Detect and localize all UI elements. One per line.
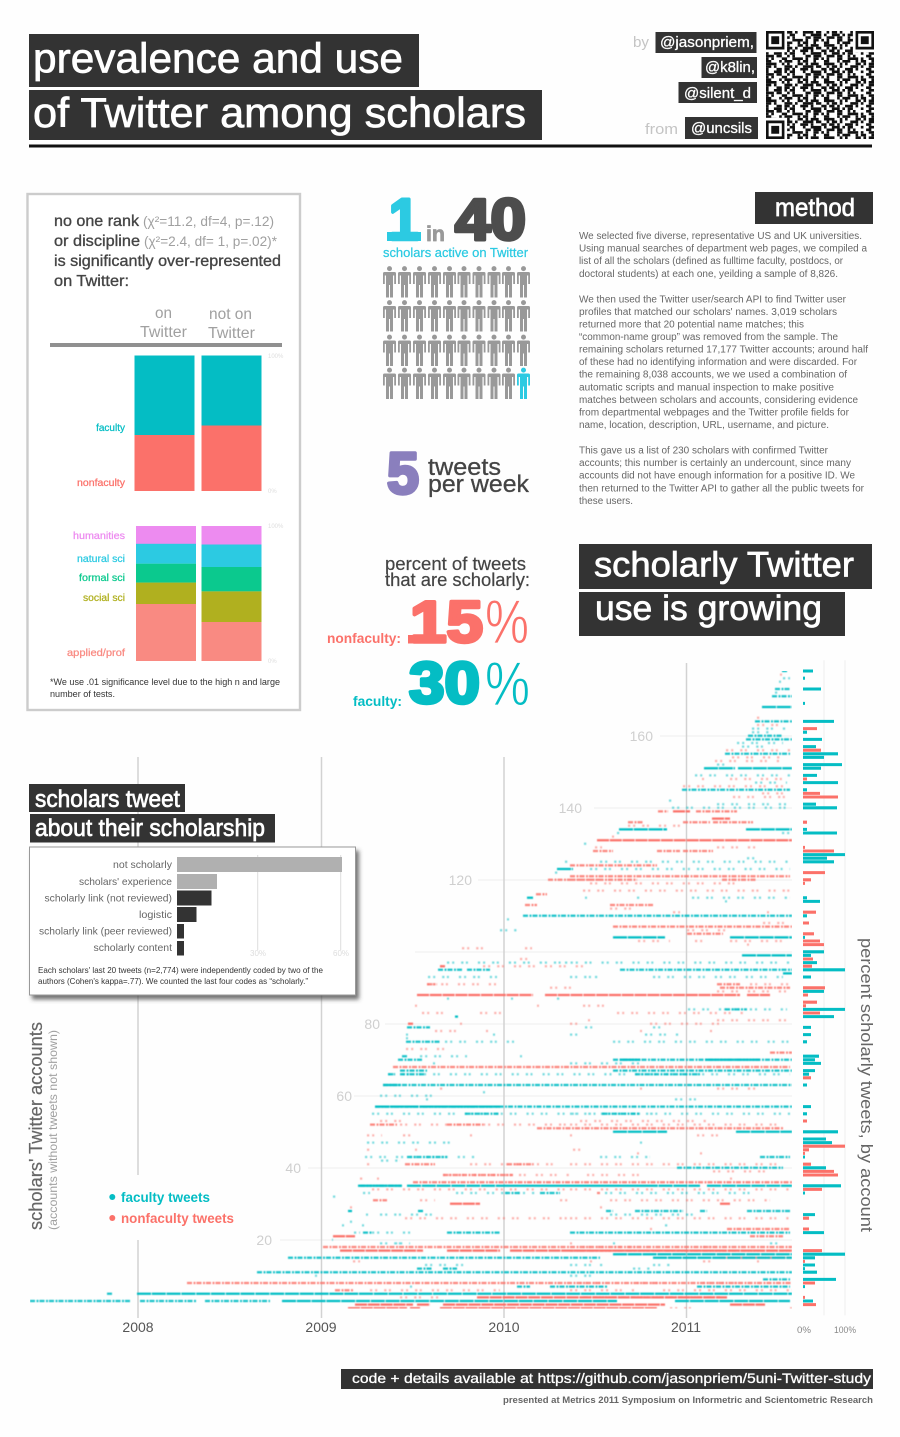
bar chart gridlines [258, 855, 341, 950]
medium nonfaculty tweets [187, 811, 792, 1297]
heading: scholarly Twitter use is growing: scholarly Twitter [594, 546, 854, 584]
text block: method description: from departmental webpages and the Twitter profile fields for [579, 408, 850, 418]
footer: code link [341, 1369, 873, 1389]
footnote: number of tests. [50, 689, 115, 699]
chart note [38, 965, 323, 986]
panel: tweet coding bar chart [30, 847, 356, 995]
stat: nonfaculty 15%: % [485, 588, 529, 657]
heading: method [755, 192, 873, 224]
bar axis labels [797, 1325, 856, 1336]
account-axis tick labels: 60 [336, 1088, 352, 1104]
by label: by [633, 34, 650, 51]
column headers: Twitter [208, 325, 255, 342]
title line 2: of Twitter among scholars [33, 89, 526, 136]
bar chart: not scholarly [113, 859, 173, 871]
bar axis title: percent scholarly tweets, by account [857, 938, 875, 1232]
chart: rank stacked bars: nonfaculty [77, 478, 125, 489]
author: k8lin: @k8lin, [705, 59, 755, 76]
heading: scholars tweet about their scholarship: scholars tweet [35, 786, 180, 813]
stat: 5 tweets per week: per week [428, 471, 530, 498]
panel heading: no one rank [54, 213, 140, 230]
from label: from [645, 121, 678, 138]
panel: rank and discipline [28, 194, 300, 710]
bar chart: 30% [250, 949, 266, 958]
account-axis tick labels [256, 728, 653, 1248]
chart: rank stacked bars: 100% [268, 354, 284, 360]
text block: method description: matches between scholars and accounts, considering evidence [579, 395, 858, 406]
panel heading: or discipline [54, 233, 140, 250]
text block: method description: “common-name group” was removed from the sample. The [579, 332, 838, 343]
chart: rank stacked bars [77, 354, 284, 495]
heading: scholarly Twitter use is growing [579, 544, 872, 636]
icon: QR code [766, 31, 874, 139]
stat: faculty 30%: 30 [409, 651, 480, 716]
chart: discipline stacked bars: natural sci [77, 554, 125, 565]
chart: rank stacked bars: faculty [96, 423, 125, 434]
stat: 5 tweets per week: 5 [387, 442, 419, 506]
stat heading: percent of tweets [385, 554, 530, 590]
chart note: authors (Cohen's kappa=.77). We counted the last four codes as “scholarly.” [38, 976, 308, 986]
y axis label [25, 1022, 60, 1230]
stat: faculty 30%: faculty: [353, 693, 402, 709]
pictogram: 39 of 40 people [383, 266, 530, 399]
footer: code link: code + details available at https://github.com/jasonpriem/5uni-Twitter-study [352, 1370, 871, 1386]
panel heading [54, 213, 281, 290]
text block: method description: automatic scripts and manual inspection to make positive [579, 382, 834, 394]
faculty bars [803, 671, 845, 1301]
panel heading: (χ²=2.4, df= 1, p=.02)* [144, 233, 278, 249]
year labels [122, 1319, 701, 1335]
bar chart: 60% [333, 949, 349, 958]
heading: scholarly Twitter use is growing: use is growing [595, 589, 822, 628]
heading: scholars tweet about their scholarship [29, 784, 275, 842]
column headers: on [155, 305, 172, 322]
authors [633, 32, 758, 139]
chart: discipline stacked bars: social sci [83, 593, 125, 604]
affiliation: uncsils: @uncsils [691, 120, 752, 137]
year labels: 2010 [488, 1319, 520, 1335]
footnote [50, 677, 280, 699]
text block: method description: Using manual searches of department web pages, we compiled a [579, 244, 867, 254]
column headers: Twitter [140, 324, 187, 341]
author: silent_d: @silent_d [684, 85, 751, 102]
stat: 1 in 40: in [426, 223, 445, 246]
dense nonfaculty tweets [333, 811, 792, 1308]
chart: discipline stacked bars: applied/prof [67, 648, 125, 659]
year labels: 2008 [122, 1319, 154, 1335]
stat: nonfaculty 15%: 15 [410, 590, 483, 655]
text block: method description: accounts did not have enough information for a positive ID. We [579, 470, 855, 482]
panel heading: on Twitter: [54, 273, 129, 290]
text block: method description: doctoral students) at each one, yeilding a sample of 8,826. [579, 269, 838, 280]
account-axis tick labels: 20 [256, 1232, 272, 1248]
stat: nonfaculty 15% [327, 588, 529, 657]
account-axis tick labels: 160 [630, 728, 653, 744]
caption: scholars active on Twitter [383, 246, 528, 260]
stat heading: percent of tweets: that are scholarly: [385, 570, 530, 590]
chart: tweets timeline dot plot [25, 660, 875, 1336]
panel heading: is significantly over-represented [54, 253, 281, 270]
legend [109, 1190, 234, 1226]
chart: discipline stacked bars [67, 524, 284, 665]
text block: method description: This gave us a list of 230 scholars with confirmed Twitter [579, 446, 829, 456]
panel heading: (χ²=11.2, df=4, p=.12) [143, 213, 274, 229]
account-axis tick labels: 140 [559, 800, 582, 816]
chart: discipline stacked bars: formal sci [79, 573, 125, 584]
column headers [140, 305, 255, 342]
account-axis tick labels: 80 [364, 1016, 380, 1032]
bar chart: scholarly content [94, 942, 172, 954]
bar chart: scholars' experience [79, 876, 172, 888]
stat: faculty 30%: % [485, 650, 530, 719]
text block: method description: these users. [579, 496, 633, 507]
header rule [29, 144, 872, 148]
footer: presented at: presented at Metrics 2011 Symposium on Informetric and Scientometric Research [503, 1395, 873, 1406]
heading: scholars tweet about their scholarship: about their scholarship [35, 815, 265, 842]
text block: method description: then returned to the Twitter API to gather all the public tweets for [579, 484, 865, 494]
stat heading: percent of tweets: percent of tweets [385, 554, 526, 574]
chart: discipline stacked bars: 0% [268, 659, 277, 665]
account-axis tick labels: 120 [449, 872, 472, 888]
text block: method description: accounts; this number is certainly an undercount, since many [579, 458, 851, 469]
chart note: Each scholars' last 20 tweets (n=2,774) were independently coded by two of the [38, 965, 323, 975]
chart: discipline stacked bars: 100% [268, 524, 284, 530]
bar axis labels: 0% [797, 1325, 812, 1336]
bar chart: logistic [139, 909, 172, 921]
column headers: not on [209, 306, 252, 323]
text block: method description: remaining scholars returned 17,177 Twitter accounts; around half [579, 344, 868, 356]
nonfaculty bars [803, 729, 845, 1305]
medium faculty tweets [30, 671, 792, 1301]
legend: faculty tweets [121, 1190, 210, 1205]
tweet dots by account [30, 671, 792, 1308]
stat: 5 tweets per week: tweets [428, 454, 501, 481]
column header rule [50, 343, 282, 347]
scholarly share bars by account [803, 660, 845, 1315]
sparse faculty tweets [315, 678, 792, 1287]
gridlines [280, 736, 792, 1240]
author: jasonpriem: @jasonpriem, [660, 34, 754, 51]
stat: nonfaculty 15%: nonfaculty: [327, 630, 401, 646]
dense faculty tweets [137, 707, 792, 1301]
legend: nonfaculty tweets [121, 1211, 234, 1226]
text block: method description: We then used the Twitter user/search API to find Twitter user [579, 294, 847, 306]
bar chart [39, 857, 349, 958]
chart: rank stacked bars: 0% [268, 489, 277, 495]
header: title [29, 34, 542, 140]
text block: method description: the remaining 8,038 accounts, we we used a combination of [579, 370, 847, 380]
text block: method description: of these had no identifying information and were discarded. For [579, 357, 858, 368]
bar chart: scholarly link (peer reviewed) [39, 926, 172, 938]
account-axis tick labels: 40 [285, 1160, 301, 1176]
year labels: 2011 [671, 1319, 701, 1335]
text block: method description: name, location, description, URL, username, and picture. [579, 420, 829, 431]
stat: 1 in 40: 1 [389, 188, 419, 252]
stat: 1 in 40: 40 [455, 188, 526, 252]
bar grid [824, 660, 845, 1315]
text block: method description: list of all the scholars (defined as fulltime faculty, postdocs, or [579, 256, 844, 267]
stat: 1 in 40 [383, 188, 528, 260]
stat: 5 tweets per week [387, 442, 530, 506]
bar axis labels: 100% [834, 1325, 856, 1336]
footnote: *We use .01 significance level due to the high n and large [50, 677, 280, 687]
year lines [138, 663, 686, 1318]
bar chart: scholarly link (not reviewed) [44, 892, 172, 904]
text block: method description: returned more that 20 potential name matches; this [579, 320, 804, 330]
title line 1: prevalence and use [33, 34, 403, 82]
text block: method description [579, 231, 868, 507]
text block: method description: We selected five diverse, representative US and UK universities. [579, 231, 862, 242]
sparse nonfaculty tweets [350, 675, 792, 1308]
chart: discipline stacked bars: humanities [73, 531, 125, 542]
y axis label: scholars' Twitter accounts [25, 1022, 46, 1230]
text block: method description: profiles that matched our scholars' names. 3,019 scholars [579, 307, 837, 318]
year labels: 2009 [305, 1319, 337, 1335]
heading: method: method [775, 194, 855, 222]
y axis label: (accounts without tweets not shown) [46, 1030, 60, 1230]
stat: faculty 30% [353, 650, 530, 719]
